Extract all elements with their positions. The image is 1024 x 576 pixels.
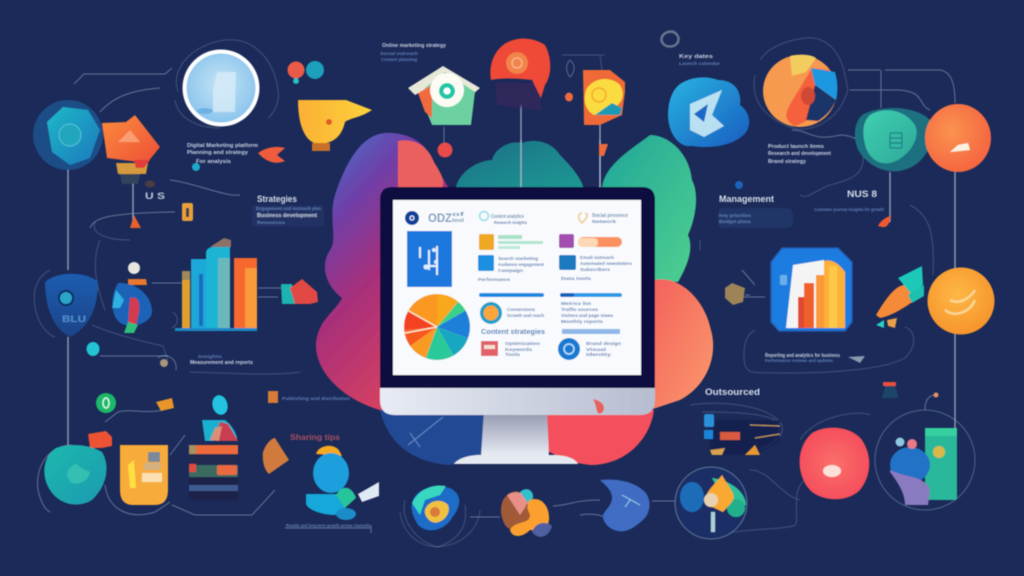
icon: yellow orange card: [583, 70, 625, 125]
dashboard items, right column: Network: [592, 219, 617, 224]
icon: seated person: [112, 262, 152, 333]
icon: blue shield: [34, 270, 98, 337]
dashboard items, left column: Content strategies: [481, 327, 545, 336]
dashboard items, right column: Visual: [586, 347, 606, 352]
icon: blue shield leaf: [600, 480, 650, 531]
heading: sharing: Sharing tips: [290, 433, 341, 442]
icon: multicolor swirl: [501, 489, 552, 537]
dot: blue: [735, 181, 743, 189]
icon: small ring: [158, 356, 176, 370]
icon: house: [408, 66, 480, 125]
icon: brown badge: [725, 283, 750, 305]
blob: teal middle: [456, 141, 584, 190]
text block: upper right: Brand strategy: [768, 159, 807, 165]
text block: strategies: Engagement and outreach plan: [256, 206, 321, 211]
dashboard items, right column: Brand design: [586, 341, 621, 346]
blob: green right: [602, 135, 696, 282]
dashboard items, left column: Content analytics: [491, 214, 524, 220]
stacked rows panel: [189, 445, 238, 500]
icon: red bloom: [490, 38, 550, 110]
text block: upper right: Product launch items: [768, 144, 824, 150]
blue poster: [407, 231, 452, 287]
text block: strategies: [252, 194, 324, 227]
text block: lower right loop: [765, 353, 865, 363]
dashboard items, left column: [478, 212, 545, 357]
icon: rocket: [876, 266, 924, 328]
text block: mid left: Insights: [198, 354, 223, 359]
icon: orange circle: [928, 268, 994, 334]
dot: teal with rule: [86, 342, 100, 356]
icon: orange diamond: [102, 115, 160, 188]
dashboard items, right column: Subscribers: [580, 267, 611, 272]
monitor bezel: [380, 187, 655, 390]
monitor: [380, 187, 655, 464]
icon: green circle: [96, 393, 116, 413]
icon: bottle and tag: [882, 382, 938, 410]
screen: [393, 200, 641, 375]
text block: mandates: Budget plans: [719, 219, 752, 224]
text block: lower right loop: Performance reviews and updates: [765, 358, 833, 363]
central background blobs: [316, 133, 713, 465]
icon: balloons: [288, 61, 324, 84]
icon: magnifier lens: [182, 50, 260, 126]
icon: red lollipop: [438, 127, 452, 158]
logo: [405, 211, 465, 225]
dashboard items, right column: Identity: [586, 352, 612, 357]
dashboard items, left column: Campaign: [498, 268, 523, 273]
monitor base: [454, 455, 578, 464]
dashboard items, left column: Conversions: [507, 307, 536, 312]
icon: small coral tag: [599, 144, 608, 156]
icon: dark dashboard cluster: [690, 403, 782, 455]
text block: top centre: [380, 43, 447, 62]
icon: red cone: [878, 216, 891, 227]
label: US: U S: [145, 191, 165, 201]
icon: brown fan: [263, 438, 289, 474]
icon: red gem: [281, 279, 318, 304]
logo: tool: [452, 218, 465, 224]
blob: coral right: [650, 279, 713, 410]
text block: top right centre: [679, 54, 720, 66]
blob: left top coral lobe: [398, 140, 443, 190]
icon: coral circle: [925, 104, 991, 172]
dashboard items, left column: Tools: [505, 352, 521, 357]
icon: leaf in ring: [675, 467, 747, 539]
monitor chin: [380, 388, 655, 415]
text block: right caption: Customer journey insights for growth: [814, 207, 884, 212]
icon: small cone: [130, 215, 141, 228]
icon: small coral dot with leaf: [565, 60, 574, 102]
icon: red circle with heart: [800, 428, 869, 499]
icon: orange and blue circle: [763, 55, 837, 127]
blob: red lower right: [545, 410, 654, 465]
dashboard items, left column: Keywords: [505, 347, 533, 352]
connector lines: [38, 38, 955, 547]
text block: top left: For analysis: [196, 159, 231, 165]
text block: bottom caption: Results and long-term growth across channels: [286, 523, 370, 528]
text block: top left: Planning and strategy: [187, 150, 249, 156]
text block: top right centre: Launch calendar: [679, 61, 720, 66]
dot: teal: [192, 163, 200, 171]
text block: bottom left tag: [268, 391, 350, 403]
dashboard items, left column: Optimization: [505, 341, 540, 346]
logo: of: [452, 212, 465, 218]
dashboard items, right column: Data tools: [561, 276, 592, 281]
text block: mandates: Key priorities: [719, 213, 752, 218]
dashboard items, right column: Traffic sources: [561, 307, 599, 312]
monitor stand: [481, 410, 549, 457]
text block: top left: [187, 143, 258, 165]
logo: ODZ: [428, 211, 452, 225]
icon: red tag: [88, 431, 112, 448]
text block: top left: Digital Marketing platform: [187, 143, 258, 149]
icon: teal leaf blob: [44, 445, 107, 505]
text block: strategies: Strategies: [257, 194, 297, 204]
stems over blobs: [521, 140, 600, 190]
dashboard items, left column: Growth and reach: [507, 313, 544, 318]
bar chart: [175, 238, 257, 331]
dashboard items, right column: Automated newsletters: [580, 261, 633, 266]
text block: top centre: Social outreach: [380, 51, 418, 56]
icon: rainbow globe: [404, 485, 466, 547]
heading: lower right: Outsourced: [705, 387, 760, 397]
icon: green square blob: [855, 108, 932, 171]
logo: O: [409, 216, 415, 222]
text block: strategies: Resources: [257, 220, 286, 225]
icon: figure with teal head: [202, 393, 238, 441]
dashboard items, left column: Research insights: [494, 220, 527, 225]
dashboard items, right column: Monthly reports: [561, 319, 604, 324]
dashboard items, right column: Social presence: [592, 213, 628, 219]
icon: teal hexagon in circle: [33, 100, 103, 170]
icon: small orange tag: [182, 203, 193, 221]
dashboard items, left column: Audience engagement: [498, 262, 544, 267]
icon: blue cloud: [668, 77, 749, 147]
text block: top centre: Online marketing strategy: [382, 43, 447, 49]
blob: left blue to magenta: [316, 133, 450, 415]
text block: upper right: [768, 144, 831, 165]
dashboard items, right column: Email outreach: [580, 255, 614, 260]
text block: strategies: Business development: [257, 213, 317, 219]
text block: bottom left tag: Publishing and distribution: [282, 396, 350, 401]
text block: mandates: Management: [719, 194, 774, 204]
text block: lower right loop: Reporting and analytics for business: [765, 353, 840, 359]
icon: yellow card: [120, 445, 168, 505]
blob: blue lower left: [380, 410, 490, 465]
icon: yellow pot: [298, 100, 372, 151]
dashboard items, right column: Visitors and page views: [561, 313, 614, 318]
icon: person with cap and tablet: [306, 446, 379, 520]
bar chart card: [771, 248, 852, 331]
label: numeric: NUS 8: [847, 189, 877, 199]
text block: mid left: Measurement and reports: [190, 360, 253, 366]
text block: upper right: Research and development: [768, 151, 831, 157]
text block: mandates: [718, 194, 793, 228]
icon: coral fish: [258, 147, 285, 163]
text block: mid left: [190, 354, 253, 366]
icon: grey ring: [661, 32, 678, 46]
dashboard items, left column: Performance: [478, 277, 511, 282]
icon: blue shield: BLU: [62, 314, 86, 324]
bookmark on chin: [593, 399, 604, 414]
dashboard items, right column: [558, 213, 633, 360]
dashboard items, left column: Search marketing: [498, 256, 538, 261]
pie chart: [404, 294, 470, 360]
text block: top centre: Content planning: [381, 57, 417, 62]
dashboard items, right column: Metrics list: [561, 301, 592, 306]
text block: top right centre: Key dates: [679, 54, 713, 60]
icon: figure at teal panel: [875, 410, 975, 510]
icon: orange stripes: [156, 398, 174, 411]
